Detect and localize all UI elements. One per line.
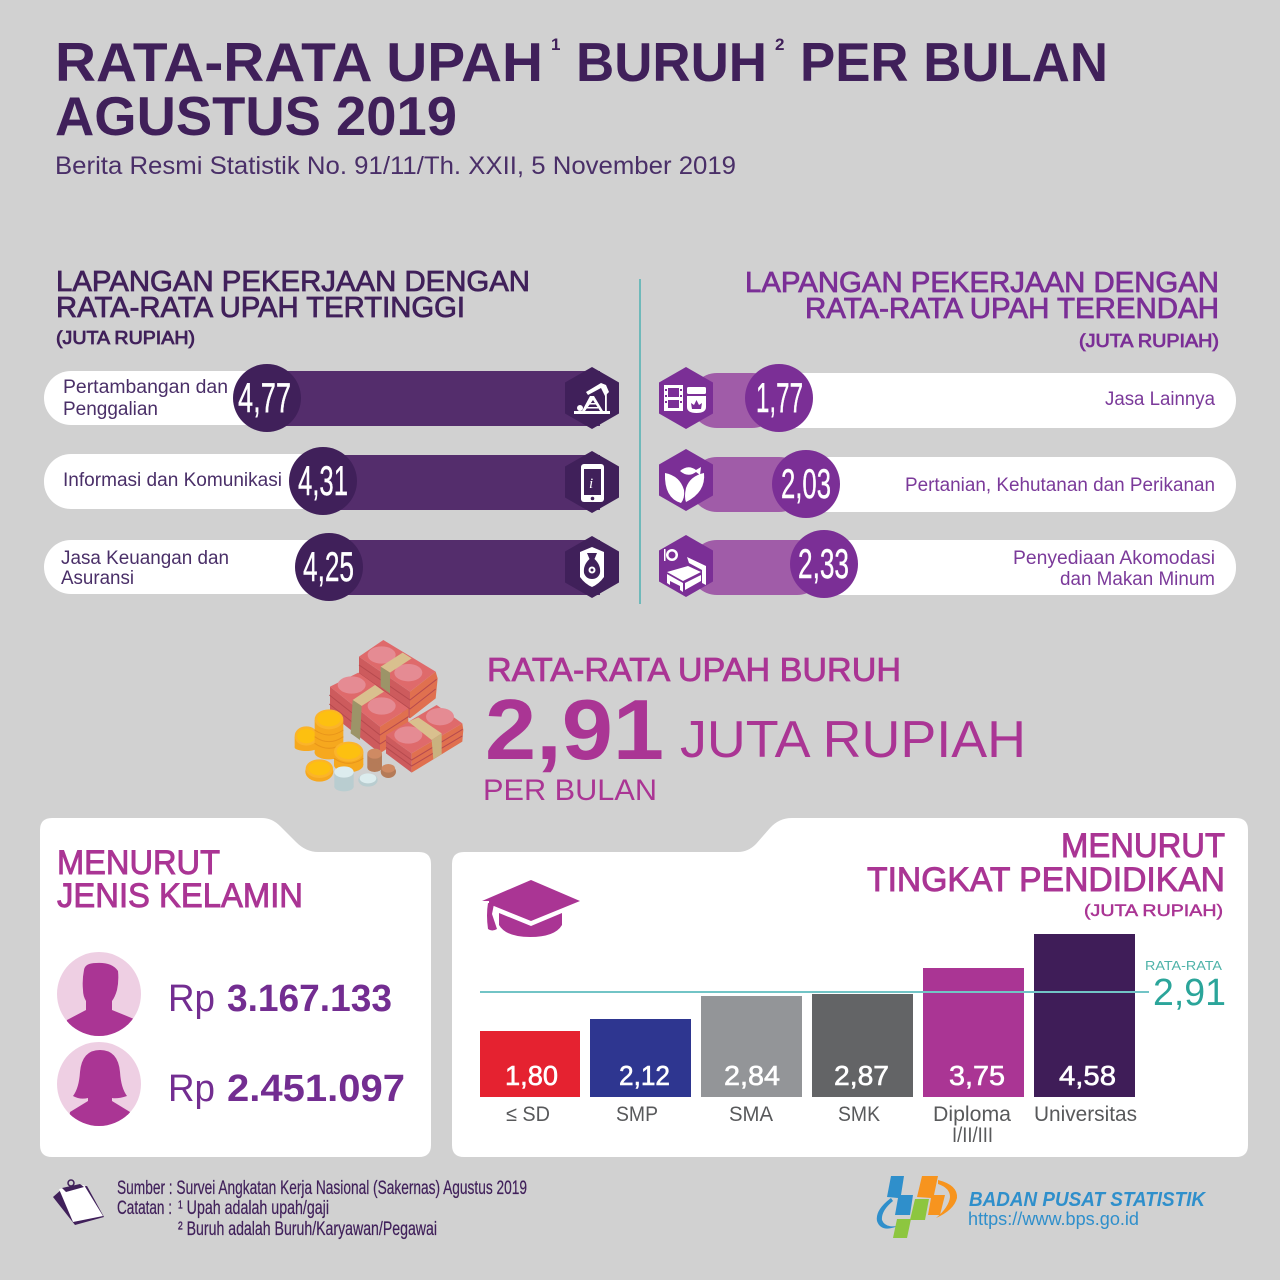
row: Informasi dan Komunikasi 4,31: Informasi dan Komunikasi xyxy=(63,470,282,491)
bar: Diploma: I/II/III xyxy=(952,1124,993,1147)
icon: clipboard xyxy=(53,1180,104,1225)
row: Jasa Lainnya 1,77: 1,77 xyxy=(756,374,803,421)
text: female wage: 2.451.097 xyxy=(227,1068,405,1110)
icon: shield with money bag xyxy=(580,547,604,587)
heading: by education: TINGKAT PENDIDIKAN xyxy=(867,861,1225,899)
row: Pertambangan dan Penggalian 4,77 xyxy=(44,364,619,432)
heading: lowest wage sectors: (JUTA RUPIAH) xyxy=(1079,331,1219,351)
source and notes: Catatan : xyxy=(117,1198,172,1219)
heading: by gender: MENURUT xyxy=(57,844,220,882)
text: female wage: Rp xyxy=(168,1068,215,1110)
row: Penyediaan Akomodasi dan Makan Minum 2,33 xyxy=(659,530,1236,598)
bar: Diploma: Diploma xyxy=(933,1103,1011,1126)
bar: SMA xyxy=(701,996,802,1126)
source and notes xyxy=(117,1178,527,1240)
row: Penyediaan Akomodasi dan Makan Minum 2,33: 2,33 xyxy=(798,540,849,587)
bar: SMK: SMK xyxy=(838,1103,880,1126)
heading: by education xyxy=(867,827,1225,920)
panel: by education xyxy=(452,818,1248,1157)
icon: oil pump xyxy=(574,383,610,414)
heading: highest wage sectors: (JUTA RUPIAH) xyxy=(56,328,195,348)
title: AGUSTUS 2019 xyxy=(55,85,457,147)
row: Jasa Lainnya 1,77 xyxy=(659,364,1236,432)
bar: SMA: 2,84 xyxy=(724,1060,780,1091)
bar: SD: 1,80 xyxy=(505,1060,558,1091)
heading: by gender xyxy=(57,844,303,915)
row: Jasa Keuangan dan Asuransi 4,25: Asuransi xyxy=(61,568,134,589)
title: RATA-RATA UPAH xyxy=(55,31,543,93)
row: Pertambangan dan Penggalian 4,77: 4,77 xyxy=(238,374,291,421)
bar: Diploma: 3,75 xyxy=(949,1060,1005,1091)
bar: SMK: 2,87 xyxy=(834,1060,889,1091)
heading: lowest wage sectors: LAPANGAN PEKERJAAN DENGAN xyxy=(745,267,1219,299)
row: Penyediaan Akomodasi dan Makan Minum 2,33: dan Makan Minum xyxy=(1060,569,1215,590)
heading: highest wage sectors xyxy=(56,266,530,348)
text: average line label xyxy=(1145,958,1226,1014)
bar: SMK xyxy=(812,994,913,1126)
icon: graduation cap xyxy=(482,880,580,937)
text: BPS name and URL xyxy=(968,1189,1206,1229)
title: BURUH xyxy=(576,31,767,93)
bar: Universitas xyxy=(1034,934,1137,1126)
title: PER BULAN xyxy=(800,31,1108,93)
icon: smartphone info: i xyxy=(589,476,593,492)
callout: average wage: RATA-RATA UPAH BURUH xyxy=(487,651,901,688)
row: Pertambangan dan Penggalian 4,77: Pertambangan dan xyxy=(63,377,228,398)
row: Jasa Keuangan dan Asuransi 4,25: 4,25 xyxy=(303,543,354,590)
text: male wage: 3.167.133 xyxy=(227,978,392,1020)
icon: leaves and fish xyxy=(665,467,704,503)
callout: average wage: 2,91 xyxy=(485,683,664,778)
heading: by education: (JUTA RUPIAH) xyxy=(1084,901,1223,920)
text: average line label: 2,91 xyxy=(1153,972,1226,1014)
row: Jasa Lainnya 1,77: Jasa Lainnya xyxy=(1105,389,1215,410)
bar: SD xyxy=(480,1031,580,1126)
bar: Universitas: 4,58 xyxy=(1059,1060,1116,1091)
icon: film and theatre mask xyxy=(664,385,706,413)
bar: Diploma xyxy=(923,968,1024,1147)
row: Pertambangan dan Penggalian 4,77: Penggalian xyxy=(63,399,158,420)
panel: by gender xyxy=(40,818,431,1157)
text: male wage: Rp xyxy=(168,978,215,1020)
row: Informasi dan Komunikasi 4,31: 4,31 xyxy=(298,457,348,504)
panel: lowest wage bars xyxy=(659,364,1236,598)
callout: average wage xyxy=(483,651,1026,807)
icon: smartphone info xyxy=(581,464,604,502)
source and notes: Sumber : Survei Angkatan Kerja Nasional (Sakernas) Agustus 2019 xyxy=(117,1178,527,1199)
bar: SD: ≤ SD xyxy=(506,1103,550,1126)
heading: by education: MENURUT xyxy=(1061,827,1225,865)
title xyxy=(55,31,1108,147)
row: Pertanian, Kehutanan dan Perikanan 2,03: 2,03 xyxy=(781,460,831,507)
icon: male avatar xyxy=(57,952,141,1040)
row: Penyediaan Akomodasi dan Makan Minum 2,33: Penyediaan Akomodasi xyxy=(1013,548,1215,569)
icon: female avatar xyxy=(57,1042,141,1130)
heading: highest wage sectors: RATA-RATA UPAH TERTINGGI xyxy=(56,292,465,324)
source and notes: ¹ Upah adalah upah/gaji xyxy=(178,1198,329,1219)
heading: by gender: JENIS KELAMIN xyxy=(57,877,303,915)
row: Informasi dan Komunikasi 4,31 xyxy=(44,447,619,515)
text: BPS name and URL: BADAN PUSAT STATISTIK xyxy=(969,1189,1206,1211)
heading: lowest wage sectors xyxy=(745,267,1219,351)
panel: highest wage bars xyxy=(44,364,619,601)
source and notes: ² Buruh adalah Buruh/Karyawan/Pegawai xyxy=(178,1219,437,1240)
callout: average wage: JUTA RUPIAH xyxy=(680,711,1026,769)
bar: Universitas: Universitas xyxy=(1034,1103,1137,1126)
row: Jasa Keuangan dan Asuransi 4,25: Jasa Keuangan dan xyxy=(61,548,229,569)
bar: SMP xyxy=(590,1019,691,1126)
text: BPS name and URL: https://www.bps.go.id xyxy=(968,1209,1139,1229)
icon: plate and bed xyxy=(664,549,706,592)
subtitle: Berita Resmi Statistik No. 91/11/Th. XXII, 5 November 2019 xyxy=(55,152,736,180)
title: 1 xyxy=(551,35,560,54)
bar: SMP: SMP xyxy=(616,1103,658,1126)
title: 2 xyxy=(775,35,784,54)
row: Pertanian, Kehutanan dan Perikanan 2,03 xyxy=(659,449,1236,518)
row: Pertanian, Kehutanan dan Perikanan 2,03: Pertanian, Kehutanan dan Perikanan xyxy=(905,475,1215,496)
heading: lowest wage sectors: RATA-RATA UPAH TERENDAH xyxy=(805,293,1219,325)
illustration: money stacks and coins xyxy=(295,640,463,791)
bar: SMA: SMA xyxy=(729,1103,773,1126)
bar chart: wage by education xyxy=(480,934,1137,1147)
heading: highest wage sectors: LAPANGAN PEKERJAAN DENGAN xyxy=(56,266,530,298)
row: Jasa Keuangan dan Asuransi 4,25 xyxy=(44,533,619,601)
logo: BPS xyxy=(877,1176,957,1238)
bar: SMP: 2,12 xyxy=(619,1060,670,1091)
text: average line label: RATA-RATA xyxy=(1145,958,1222,973)
callout: average wage: PER BULAN xyxy=(483,774,657,807)
